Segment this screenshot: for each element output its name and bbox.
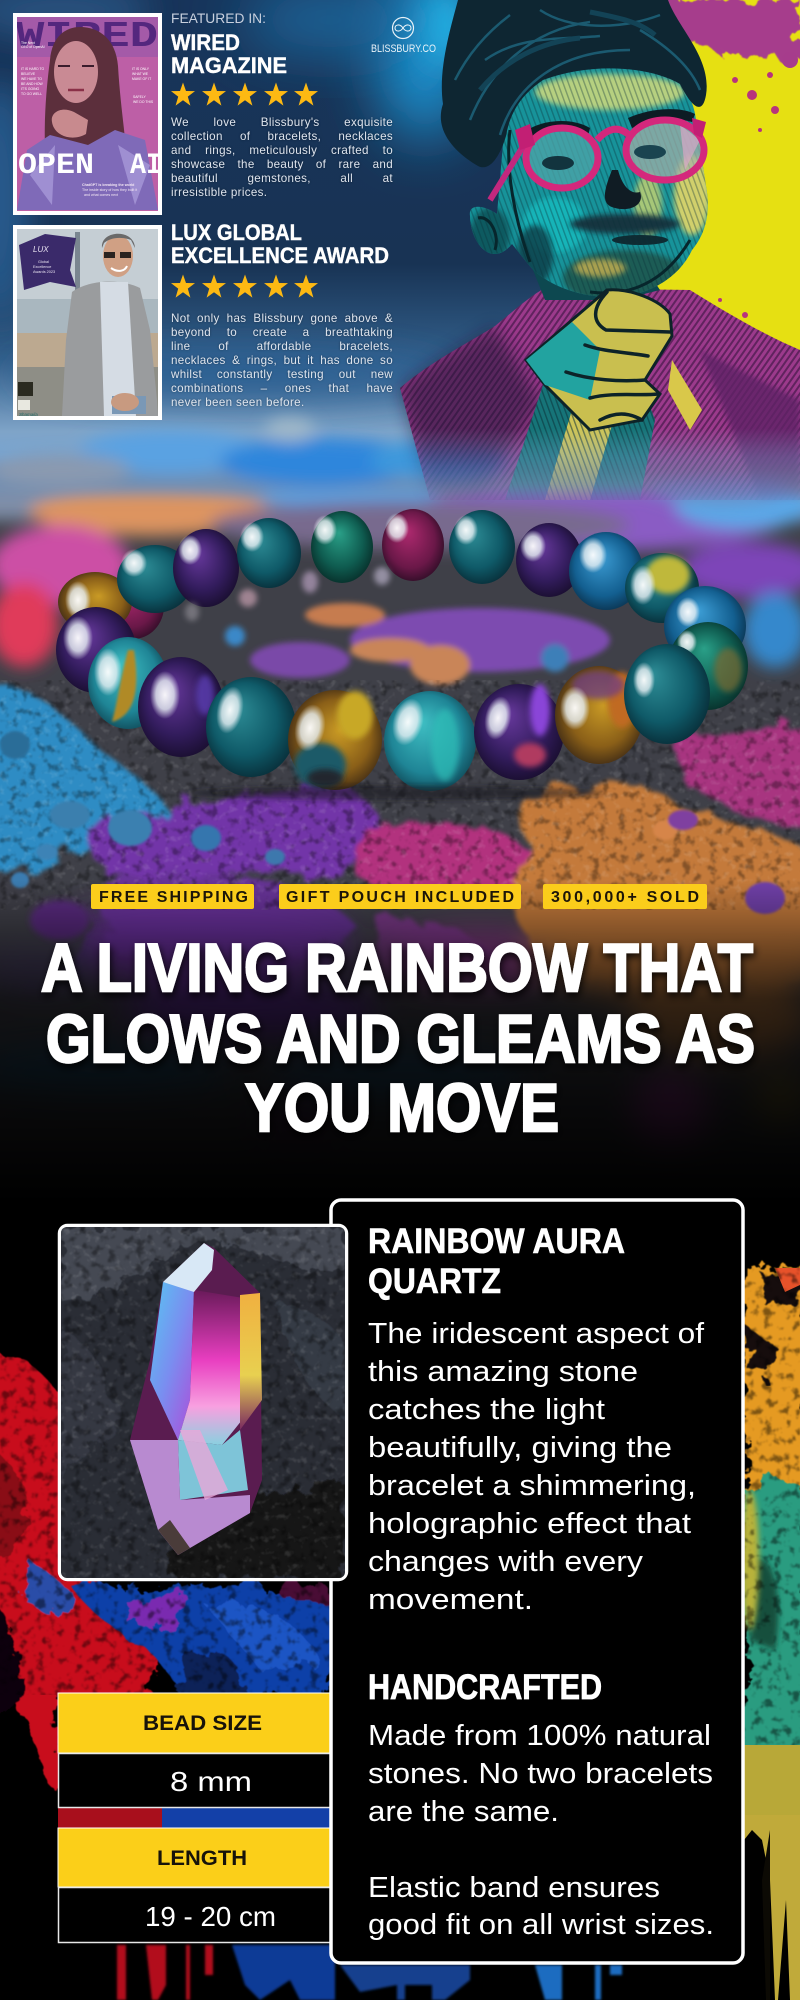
text: lux global award review: combinations – ones that have [171,382,393,395]
five star rating: wired [171,82,318,106]
magazine cover: wired: SAFELY [133,95,146,99]
front bead: gold and teal [288,690,382,790]
featured in label: FEATURED IN: [171,10,266,26]
paint drips at the bottom [117,1945,622,2000]
background: top blurred blue sky [0,0,800,480]
award photo: lux global: Excellence [33,265,51,269]
nose shadow [605,170,641,209]
text: crystal description: The iridescent aspect of [368,1318,705,1350]
magazine cover: wired: IT IS HARD TO [21,67,45,71]
badge: free shipping [91,884,254,909]
bracelet of colorful beads [56,509,748,800]
text: lux global award review: Not only has Blissbury gone above & [171,312,393,325]
text: wired magazine review: We love Blissbury's exquisite [171,116,393,129]
text: crystal description: beautifully, giving the [368,1432,672,1464]
award photo: lux global: LUX [33,245,49,254]
heading: rainbow aura quartz: RAINBOW AURA [368,1222,625,1261]
text: wired magazine review: collection of bracelets, necklaces [171,130,393,143]
inner ring powder [225,603,610,685]
text: crystal description: this amazing stone [368,1356,638,1388]
bead size spec table [58,1693,330,1808]
magazine cover: wired: CEO of OpenAI [21,45,45,49]
front bead: teal gold [88,637,168,729]
heading: rainbow aura quartz: QUARTZ [368,1262,501,1301]
magazine cover: wired: BE AND HOW [21,82,43,86]
magazine cover: wired: ChatGPT is breaking the world [82,183,134,187]
yellow shirt strip [668,360,702,430]
text: handcrafted description: are the same. [368,1796,559,1828]
text: wired magazine review: and rings, meticulously crafted to [171,144,393,157]
eyebrows [531,109,695,136]
crystal [130,1243,262,1555]
main headline: YOU MOVE [245,1070,559,1146]
text: lux global award review: never been seen before. [171,396,305,409]
magazine cover: wired: The Next [21,41,35,45]
magazine cover: wired: BELIEVE [21,72,36,76]
badge: gift pouch included: GIFT POUCH INCLUDED [286,889,514,906]
badge: free shipping: FREE SHIPPING [99,889,248,906]
bead shadows on table [185,786,605,800]
heading: wired magazine: WIRED [171,30,240,55]
magazine cover: wired: TO GO WELL [21,92,42,96]
forearms [505,385,655,500]
text: lux global award review [170,312,393,409]
text: handcrafted description [368,1720,714,1941]
award photo: lux global: Global [38,260,49,264]
crystal photo card [60,1226,346,1580]
magazine cover: wired [13,13,162,215]
blurred far powder [0,470,800,668]
text: lux global award review: whilst constantly testing out new [171,368,393,381]
magazine cover: wired: WE DO THIS [133,100,154,104]
main headline [41,930,755,1146]
soften seam between sky and powder [0,418,800,504]
pop art man portrait [400,0,800,500]
bead size spec table: 8 mm [170,1766,252,1797]
seated man in grey blazer [62,282,158,416]
text: crystal description: movement. [368,1584,533,1616]
magazine cover: wired: IT'S GOING [21,87,40,91]
logo: blissbury infinity mark: BLISSBURY.CO [371,43,436,55]
text: crystal description: catches the light [368,1394,605,1426]
paint splash: right orange, green and yellow [741,1265,800,2000]
heading: wired magazine: MAGAZINE [171,53,287,78]
sharp foreground powder heaps [0,680,800,990]
hair [441,0,707,167]
badge: units sold [543,884,707,909]
heading: handcrafted: HANDCRAFTED [368,1668,602,1707]
magazine cover: wired: WE HAVE TO [21,77,42,81]
magenta ink spatter [640,0,800,318]
magazine cover: wired: AI [130,149,162,183]
text: crystal description: changes with every [368,1546,644,1578]
five star rating: lux global [171,274,318,298]
magazine cover: wired: WIRED [16,16,158,57]
magazine cover: wired: WHAT WE [132,72,149,76]
length spec table: 19 - 20 cm [145,1901,276,1932]
badge: gift pouch included [279,884,521,909]
back beads [56,509,748,710]
logo: blissbury infinity mark [371,18,436,55]
front bead: dark teal [206,677,296,777]
paint splash: left red side [0,1345,170,1790]
paint strip between spec tables [58,1806,332,1830]
small reflections under beads [185,567,390,621]
magazine cover: wired: OPEN [18,149,94,183]
heading: rainbow aura quartz [368,1222,625,1301]
rock texture [61,1227,345,1578]
magazine cover: wired: IT IS ONLY [132,67,150,71]
magazine cover: wired: The inside story of how they built it [82,188,137,192]
text: handcrafted description: stones. No two bracelets [368,1758,713,1790]
badge: units sold: 300,000+ SOLD [551,889,699,906]
magazine cover: wired: and what comes next [84,193,118,197]
face [470,68,708,296]
length spec table [58,1828,330,1942]
front bead: tiger eye gold [555,666,643,764]
heading: wired magazine [171,30,287,78]
text: wired magazine review: beautiful gemstones, all at [171,172,393,185]
magazine cover: wired: MAKE OF IT [132,77,151,81]
front bead: dark purple [138,657,224,757]
length spec table: LENGTH [157,1847,247,1870]
text: handcrafted description: Elastic band ensures [368,1872,660,1904]
text: crystal description [368,1318,705,1616]
text card with material descriptions [331,1200,743,1963]
powder crumbs [0,731,785,940]
blurred near powder [0,900,800,1150]
woman with long hair [45,27,126,150]
eyeglasses [490,118,706,200]
text: wired magazine review: irresistible prices. [171,186,267,199]
text: lux global award review: necklaces & rings, but it has done so [171,354,393,367]
text: crystal description: holographic effect that [368,1508,691,1540]
text: handcrafted description: good fit on all wrist sizes. [368,1909,714,1941]
yellow backdrop [657,0,800,350]
heading: lux global excellence award: EXCELLENCE AWARD [171,243,389,268]
dark fade under the bracelet [0,880,800,1220]
jacket [400,288,800,500]
text: wired magazine review: showcase the beauty of rare and [171,158,393,171]
neck [533,270,660,300]
clasped hands [526,290,672,430]
award photo: lux global: Shamaila [19,412,38,417]
heading: lux global excellence award: LUX GLOBAL [171,220,302,245]
bead size spec table: BEAD SIZE [143,1712,262,1735]
heading: lux global excellence award [171,220,389,268]
front bead: violet [474,684,564,780]
text: lux global award review: line of affordable bracelets, [171,340,393,353]
speckle [0,680,800,910]
text: wired magazine review [171,116,393,199]
text: handcrafted description: Made from 100% natural [368,1720,711,1752]
front bead: turquoise [384,691,476,791]
text: crystal description: bracelet a shimmering, [368,1470,696,1502]
text: lux global award review: beyond to create a breathtaking [171,326,393,339]
front bead: dark teal right [624,644,710,744]
award photo: lux global [13,225,162,420]
paint splash: center blue [0,1345,335,1700]
background: colored powder and table behind the bracelet [0,418,800,1220]
award photo: lux global: Awards 2023 [33,270,55,274]
